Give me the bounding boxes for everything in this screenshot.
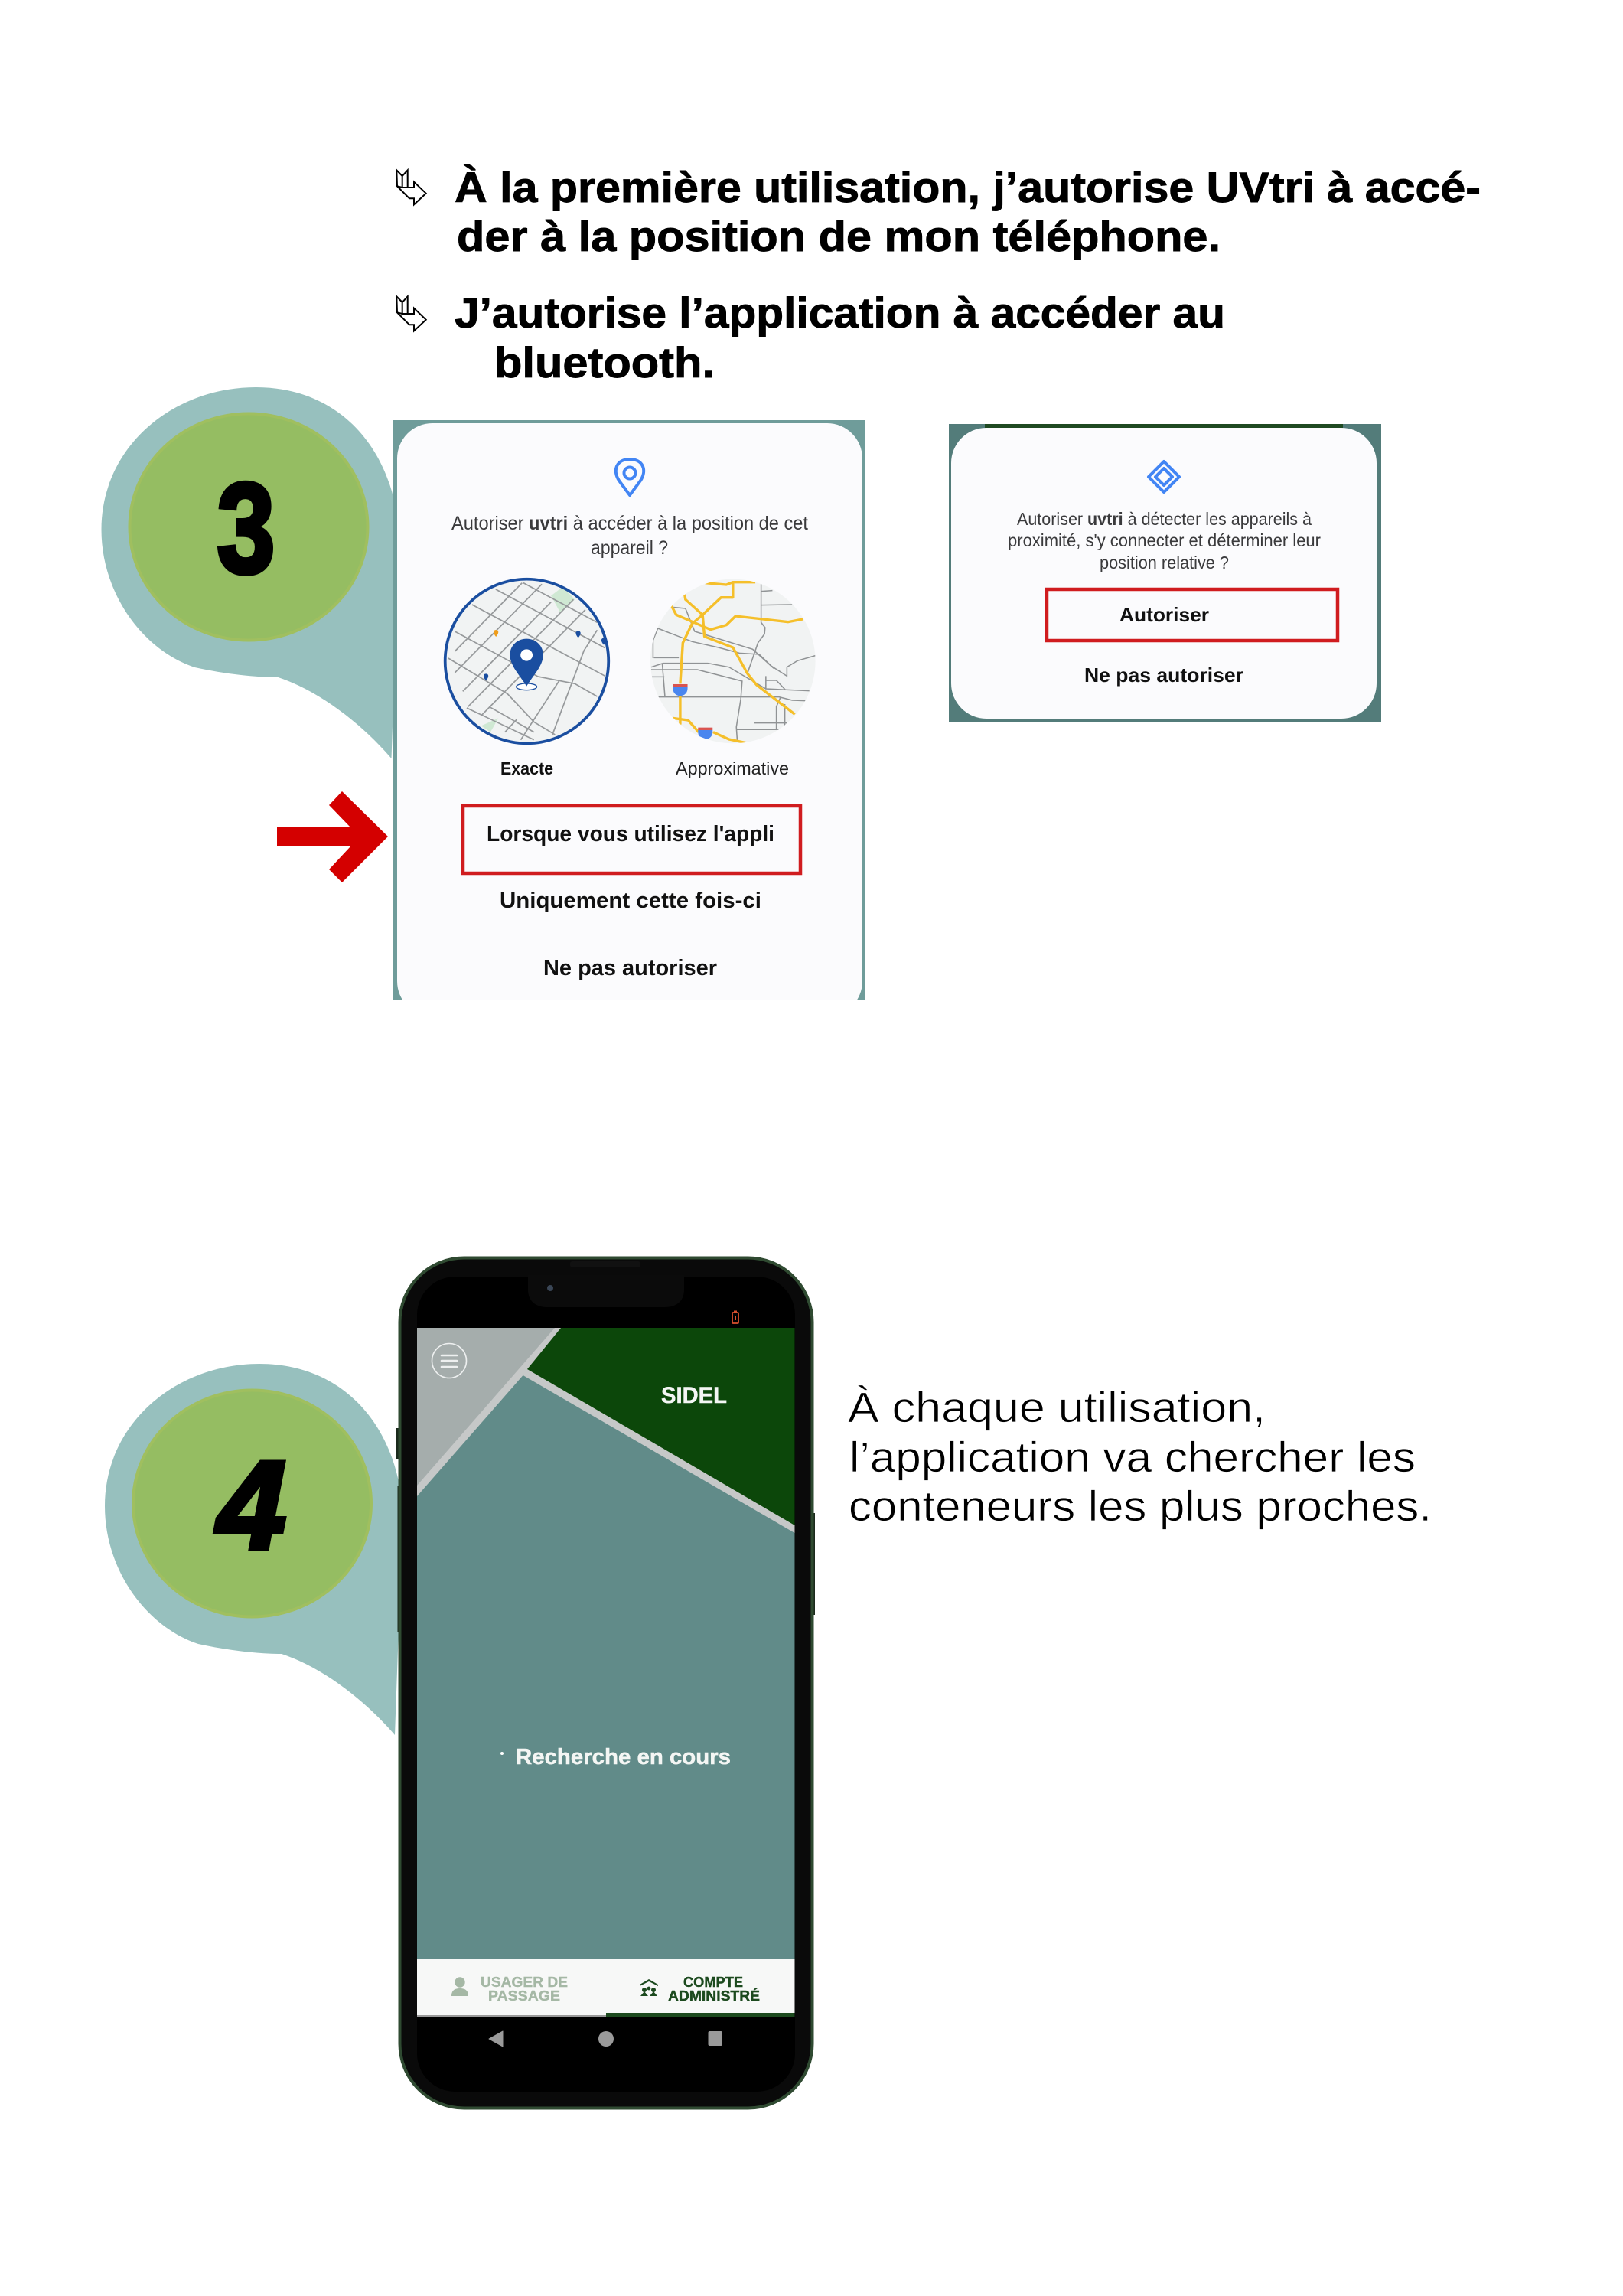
phone body xyxy=(399,1258,813,2108)
screen: background shapes xyxy=(417,1328,794,1959)
heading: second bullet xyxy=(396,289,1225,386)
tab: passing user xyxy=(481,1975,568,2004)
bubble shape 4 xyxy=(105,1364,399,1735)
bottom tab bar xyxy=(417,1959,794,2017)
dialog card xyxy=(397,423,862,1016)
inner black bezel xyxy=(417,1277,795,2092)
number 4: 4 xyxy=(215,1435,286,1576)
green disc 3 xyxy=(130,413,367,640)
red arrow xyxy=(277,791,388,882)
option: do not allow: Ne pas autoriser xyxy=(1084,664,1243,687)
heading: first bullet: der à la position de mon téléphone. xyxy=(457,212,1221,260)
heading: second bullet: J’autorise l’application à accéder au xyxy=(455,289,1225,337)
option: only this time: Uniquement cette fois-ci xyxy=(500,889,761,913)
panel background xyxy=(393,420,865,1000)
heading: second bullet: bluetooth. xyxy=(494,338,715,386)
tab: managed account xyxy=(668,1975,760,2004)
bluetooth question text: Autoriser uvtri à détecter les appareils à xyxy=(1017,509,1312,529)
phone mockup xyxy=(396,1258,815,2108)
bubble shape 3 xyxy=(101,387,396,758)
tab: managed account: COMPTE xyxy=(683,1975,743,1990)
speaker xyxy=(570,1261,640,1267)
body text: search explanation: conteneurs les plus proches. xyxy=(849,1482,1432,1530)
panel: location permission dialog xyxy=(393,420,865,1016)
camera xyxy=(547,1285,553,1291)
tab: passing user: USAGER DE xyxy=(481,1975,568,1990)
body text: search explanation: À chaque utilisation, xyxy=(848,1383,1266,1431)
option: while using app: Lorsque vous utilisez l'appli xyxy=(487,822,774,846)
tab: passing user: PASSAGE xyxy=(488,1988,560,2004)
highlighted allow box xyxy=(1047,589,1338,641)
icon: battery xyxy=(732,1310,738,1323)
highlighted option box xyxy=(463,806,800,873)
top dark strip xyxy=(985,424,1343,428)
icon: location pin xyxy=(616,459,644,495)
icon: roof and family xyxy=(640,1979,658,1996)
option: allow: Autoriser xyxy=(1119,603,1209,626)
step 4 number bubble xyxy=(105,1364,399,1735)
icon: bullet arrow 2 xyxy=(396,296,426,331)
screen title: SIDEL xyxy=(661,1383,727,1408)
icon: nearby devices diamond xyxy=(1149,461,1179,492)
android navigation buttons xyxy=(489,2031,722,2047)
side buttons xyxy=(396,1428,815,1632)
dialog card xyxy=(951,428,1377,719)
icon: menu button xyxy=(432,1344,467,1378)
notch xyxy=(528,1275,684,1307)
body text: search explanation xyxy=(848,1383,1432,1530)
option: do not allow: Ne pas autoriser xyxy=(543,956,717,980)
map labels: Approximative xyxy=(676,758,789,778)
search status: Recherche en cours xyxy=(516,1745,731,1769)
map: exact location xyxy=(445,579,608,743)
heading: first bullet xyxy=(396,163,1481,260)
map labels xyxy=(501,762,788,778)
bluetooth question text: position relative ? xyxy=(1100,553,1229,572)
bluetooth question text xyxy=(1008,509,1321,572)
permission question text: Autoriser uvtri à accéder à la position de cet xyxy=(451,513,808,534)
number 3: 3 xyxy=(217,456,275,600)
icon: user xyxy=(451,1977,468,1996)
icon: bullet arrow 1 xyxy=(396,170,426,204)
panel background xyxy=(949,424,1381,722)
body text: search explanation: l’application va chercher les xyxy=(849,1433,1416,1481)
panel: bluetooth permission dialog xyxy=(949,424,1381,722)
bluetooth question text: proximité, s'y connecter et déterminer leur xyxy=(1008,530,1321,550)
map: approximate location xyxy=(650,579,816,743)
green disc 4 xyxy=(133,1390,371,1616)
map labels: Exacte xyxy=(500,758,553,778)
tab: managed account: ADMINISTRÉ xyxy=(668,1988,760,2004)
panel: location permission dialog: appareil ? xyxy=(591,537,668,559)
heading: first bullet: À la première utilisation, j’autorise UVtri à accé- xyxy=(455,163,1481,211)
step 3 number bubble xyxy=(101,387,396,758)
